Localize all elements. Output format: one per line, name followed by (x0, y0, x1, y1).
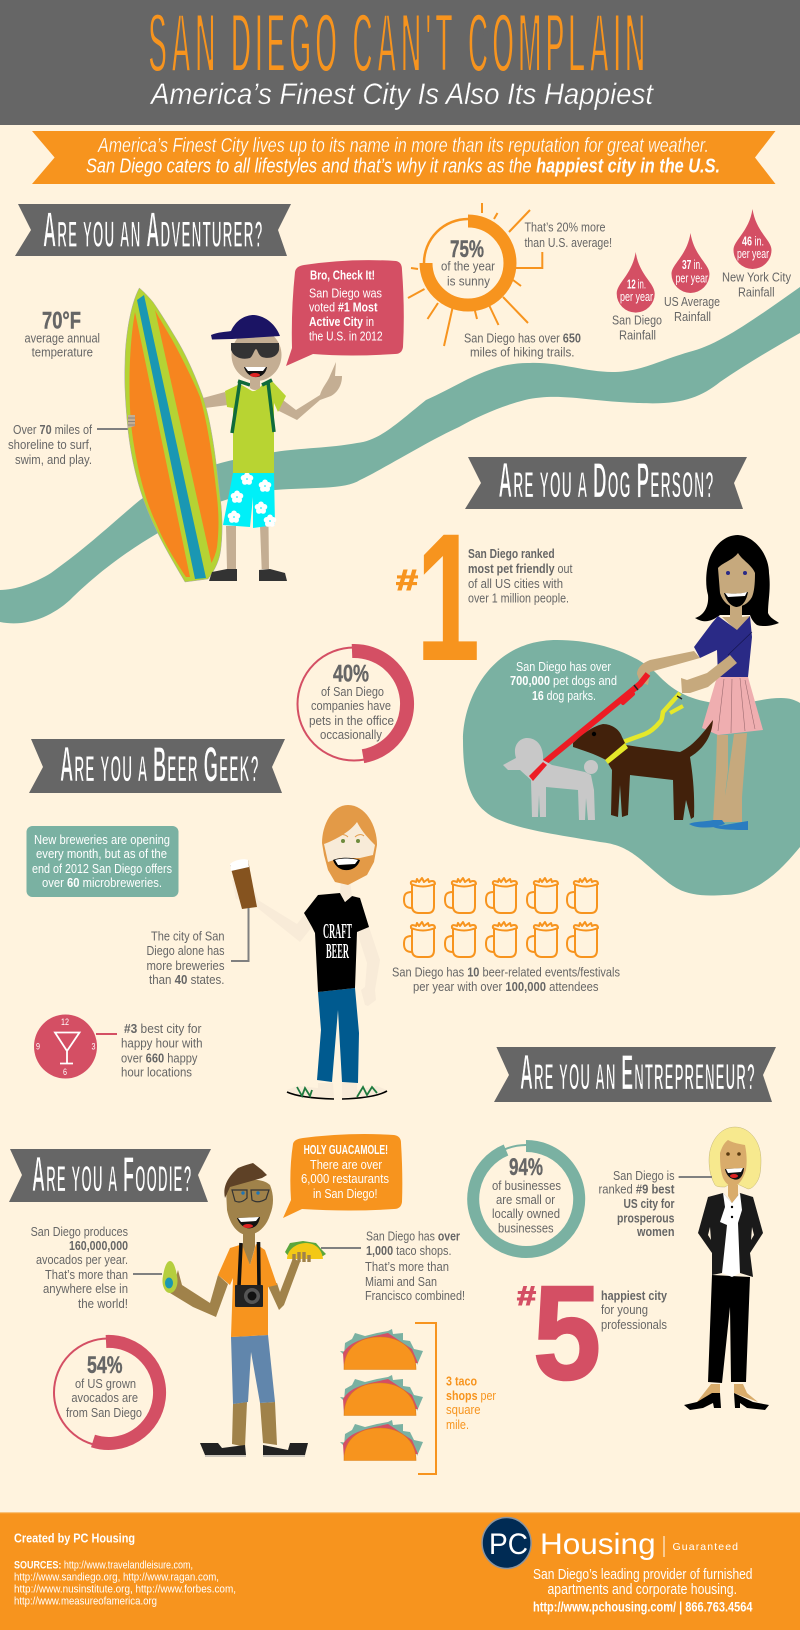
speech bubble: guacamole: There are over (310, 1157, 383, 1172)
credits: http://www.sandiego.org, http://www.ragan.com, (14, 1572, 219, 1584)
ring stat: 54%: 54% (87, 1352, 122, 1379)
callout: microbreweries: New breweries are opening (34, 832, 170, 847)
text: dog parks: San Diego has over (516, 659, 612, 674)
temperature stat: temperature (32, 345, 93, 360)
text: taco shops: Miami and San (365, 1274, 437, 1289)
text: pet friendly: over 1 million people. (468, 591, 569, 606)
ring stat: 40%: of San Diego (321, 684, 384, 699)
rain drop: New York City (722, 209, 791, 300)
illustration: bearded man with beer: BEER (326, 939, 349, 963)
credits: http://www.measureofamerica.org (14, 1596, 157, 1608)
text: young professionals: for young (601, 1302, 648, 1317)
heading: adventurer: ARE YOU AN ADVENTURER? (43, 204, 264, 259)
rain drop: New York City: Rainfall (738, 285, 775, 300)
text: happy hour: hour locations (121, 1065, 192, 1080)
ring stat: 94%: locally owned (492, 1206, 560, 1221)
text: tacos per square mile (446, 1374, 497, 1432)
ring stat: 54% (54, 1338, 162, 1446)
text: taco shops (365, 1229, 465, 1303)
speech bubble: bro: the U.S. in 2012 (309, 329, 383, 344)
text: pet friendly: of all US cities with (468, 576, 563, 591)
text: hiking trails: miles of hiking trails. (470, 345, 574, 360)
text: breweries vs states: than 40 states. (149, 972, 224, 987)
text: breweries vs states: The city of San (151, 929, 224, 944)
text: shoreline: Over 70 miles of (13, 422, 92, 437)
illustration: woman walking dogs (503, 535, 779, 830)
big #1: # (396, 565, 418, 597)
icon: martini clock: 3 (92, 1042, 96, 1052)
illustration: bearded man with beer (230, 805, 387, 1099)
ring stat: 94%: are small or (496, 1192, 556, 1207)
header band (0, 0, 800, 125)
text: young professionals (601, 1288, 668, 1332)
text: prosperous women: San Diego is (613, 1168, 675, 1183)
speech bubble: bro: Bro, Check It! (310, 267, 375, 282)
company blurb (533, 1566, 753, 1615)
credits: Created by PC Housing (14, 1531, 135, 1546)
rain drop: US average (664, 233, 720, 324)
credits: SOURCES: http://www.travelandleisure.com, (14, 1560, 193, 1572)
speech bubble: guacamole: 6,000 restaurants (301, 1171, 389, 1186)
ring stat: 54%: from San Diego (66, 1405, 142, 1420)
rain drop: San Diego: San Diego (612, 313, 662, 328)
ring stat: 54%: avocados are (71, 1390, 138, 1405)
text: avocados: San Diego produces (31, 1224, 128, 1239)
text: prosperous women (598, 1168, 712, 1239)
text: pet friendly: most pet friendly out (468, 561, 573, 576)
callout: microbreweries: over 60 microbreweries. (42, 875, 162, 890)
logo: PC Housing: Guaranteed (672, 1541, 738, 1553)
text: hiking trails: San Diego has over 650 (464, 331, 581, 346)
text: tacos per square mile: 3 taco (446, 1374, 477, 1389)
ring stat: 94% (472, 1145, 580, 1253)
text: taco shops: San Diego has over (366, 1229, 460, 1244)
text: avocados: the world! (78, 1296, 128, 1311)
text: beer events (392, 965, 620, 994)
text: avocados: avocados per year. (36, 1252, 128, 1267)
rain drop: US average: US Average (664, 294, 720, 309)
company blurb: apartments and corporate housing. (548, 1581, 737, 1598)
text: avocados (31, 1224, 128, 1311)
rain drop: US average: Rainfall (674, 309, 711, 324)
illustration: businesswoman (684, 1127, 769, 1410)
logo: PC Housing: PC (489, 1528, 528, 1561)
speech bubble: bro (286, 260, 404, 366)
text: beer events: San Diego has 10 beer-related events/festivals (392, 965, 620, 980)
text: prosperous women: ranked #9 best (598, 1181, 675, 1196)
text: happy hour: happy hour with (121, 1036, 202, 1051)
icon: martini clock: 12 (61, 1017, 69, 1027)
callout: microbreweries: every month, but as of the (36, 846, 167, 861)
text: breweries vs states: Diego alone has (146, 943, 225, 958)
logo: PC Housing: Housing (540, 1528, 656, 1561)
rain drop: San Diego: 12 in. (627, 276, 646, 291)
ring stat: 40%: occasionally (320, 727, 382, 742)
text: prosperous women: US city for (624, 1196, 674, 1211)
ring stat: 94%: businesses (498, 1221, 554, 1236)
text: sunnier than average: That’s 20% more (524, 220, 606, 235)
sun graphic: is sunny (447, 274, 490, 289)
text: shoreline: swim, and play. (15, 452, 92, 467)
rain drop: US average: 37 in. (682, 257, 702, 272)
ring stat: 40%: 40% (333, 661, 369, 688)
text: sunnier than average (524, 220, 612, 250)
ring stat: 54%: of US grown (75, 1376, 136, 1391)
text: shoreline (8, 422, 92, 467)
ring stat: 40%: companies have (311, 698, 391, 713)
heading: dog person: ARE YOU A DOG PERSON? (498, 454, 715, 509)
illustration: foodie man with camera, avocado and taco (133, 1163, 361, 1456)
text: taco shops: That’s more than (365, 1259, 449, 1274)
speech bubble: bro: San Diego was (309, 286, 382, 301)
text: young professionals: happiest city (601, 1288, 668, 1303)
sun graphic: of the year (441, 259, 496, 274)
heading: foodie: ARE YOU A FOODIE? (32, 1148, 193, 1203)
callout: microbreweries (26, 826, 178, 897)
ring stat: 40% (298, 648, 410, 760)
logo: PC Housing (482, 1518, 738, 1568)
icon: martini clock: 6 (63, 1067, 67, 1077)
illustration: bearded man with beer: CRAFT (323, 919, 352, 943)
text: happy hour (121, 1021, 202, 1080)
credits: http://www.nusinstitute.org, http://www.forbes.com, (14, 1584, 236, 1596)
text: dog parks (510, 659, 617, 703)
text: tacos per square mile: mile. (446, 1417, 469, 1432)
text: pet friendly (468, 546, 573, 606)
rain drop: San Diego (612, 252, 662, 343)
text: dog parks: 700,000 pet dogs and (510, 673, 617, 688)
speech bubble: guacamole (283, 1134, 402, 1218)
rain drop: New York City: 46 in. (742, 234, 764, 249)
text: happy hour: over 660 happy (121, 1051, 198, 1066)
rain drop: New York City: per year (737, 246, 769, 261)
big #1 (396, 495, 480, 699)
teal blob: dog section (463, 640, 800, 895)
ring stat: 94%: of businesses (492, 1178, 561, 1193)
text: avocados: 160,000,000 (69, 1238, 128, 1253)
text: dog parks: 16 dog parks. (532, 688, 596, 703)
text: pet friendly: San Diego ranked (468, 546, 555, 561)
rain drop: San Diego: per year (620, 289, 653, 304)
rain drop: San Diego: Rainfall (619, 328, 656, 343)
text: breweries vs states: more breweries (146, 958, 225, 973)
intro ribbon (32, 131, 776, 184)
text: avocados: anywhere else in (43, 1281, 128, 1296)
text: hiking trails (464, 331, 581, 360)
text: happy hour: #3 best city for (124, 1021, 202, 1036)
text: tacos per square mile: shops per (446, 1388, 497, 1403)
beer mug icons (404, 878, 598, 957)
illustration: surfer and surfboard (97, 288, 342, 582)
text: taco shops: Francisco combined! (365, 1288, 465, 1303)
company blurb: San Diego’s leading provider of furnished (533, 1566, 752, 1583)
text: avocados: That’s more than (45, 1267, 128, 1282)
heading: entrepreneur: ARE YOU AN ENTREPRENEUR? (520, 1046, 756, 1101)
big #5: 5 (533, 1259, 601, 1408)
rain drop: US average: per year (676, 270, 708, 285)
text: young professionals: professionals (601, 1317, 667, 1332)
text: shoreline: shoreline to surf, (8, 437, 92, 452)
text: breweries vs states (146, 908, 248, 987)
big #5: # (517, 1281, 536, 1311)
credits (14, 1531, 236, 1608)
speech bubble: bro: voted #1 Most (309, 300, 378, 315)
teal river (0, 287, 800, 623)
taco icons with bracket (340, 1323, 436, 1474)
icon: martini clock (34, 1014, 117, 1078)
callout: microbreweries: end of 2012 San Diego offers (32, 861, 172, 876)
intro ribbon: San Diego caters to all lifestyles and that’s why it ranks as the happiest city in the U.S. (86, 156, 720, 178)
footer (0, 1512, 800, 1630)
temperature stat: average annual (24, 331, 100, 346)
sun graphic (408, 203, 542, 346)
subtitle: America’s Finest City Is Also Its Happiest (149, 78, 655, 111)
big #1: 1 (416, 495, 480, 699)
speech bubble: bro: Active City in (309, 314, 374, 329)
text: tacos per square mile: square (446, 1402, 481, 1417)
icon: martini clock: 9 (36, 1042, 40, 1052)
speech bubble: guacamole: HOLY GUACAMOLE! (304, 1142, 388, 1157)
heading: beer geek: ARE YOU A BEER GEEK? (60, 738, 260, 793)
text: prosperous women: women (636, 1224, 675, 1239)
temperature stat (24, 307, 100, 360)
temperature stat: 70°F (42, 307, 81, 334)
ring stat: 40%: pets in the office (309, 713, 394, 728)
text: prosperous women: prosperous (617, 1211, 674, 1226)
ring stat: 94%: 94% (509, 1154, 543, 1181)
text: taco shops: 1,000 taco shops. (366, 1243, 452, 1258)
text: beer events: per year with over 100,000 attendees (413, 979, 599, 994)
speech bubble: guacamole: in San Diego! (313, 1186, 378, 1201)
sun graphic: 75% (450, 236, 484, 263)
text: sunnier than average: than U.S. average! (524, 235, 612, 250)
